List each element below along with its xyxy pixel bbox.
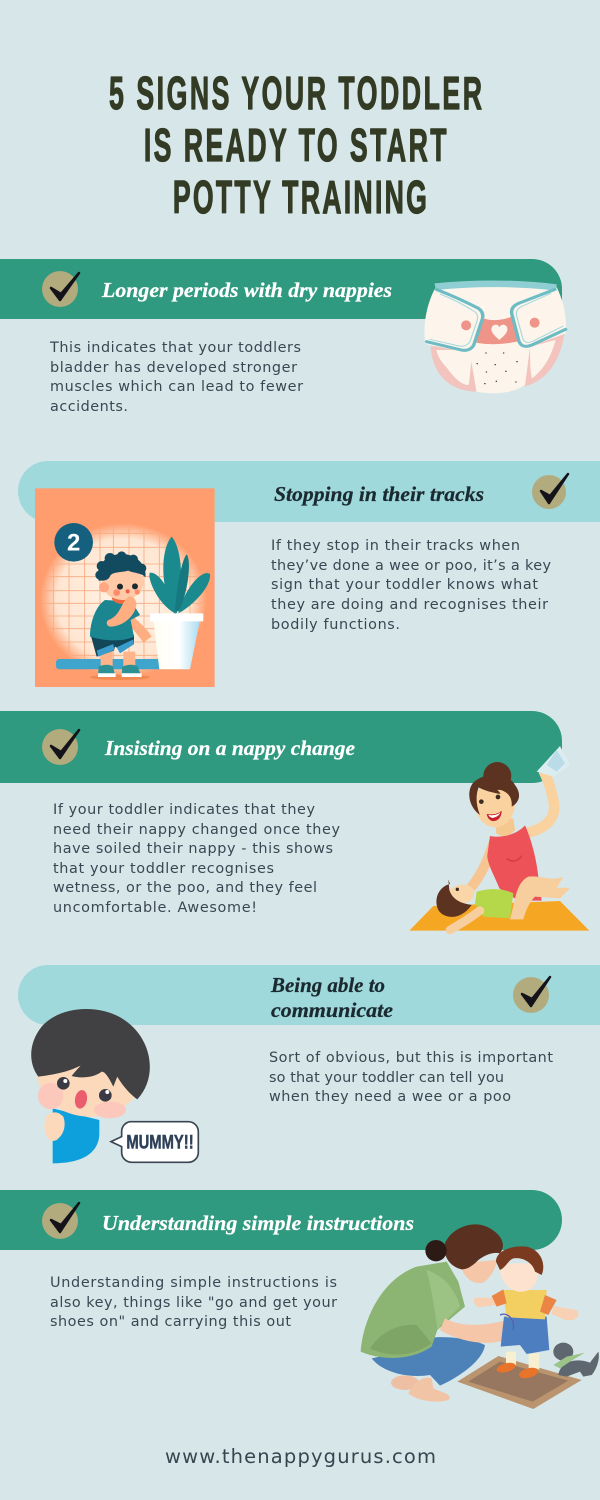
jeans [372, 1337, 485, 1386]
body text 1: This indicates that your toddlers [49, 340, 301, 356]
body text 3 [53, 802, 340, 916]
head [460, 1260, 497, 1283]
body text 1 [49, 340, 303, 415]
illustration: toddler stopping beside plant: 2 [67, 530, 80, 557]
body text 4: Sort of obvious, but this is important [269, 1050, 553, 1066]
illustration: toddler stopping beside plant [35, 488, 215, 687]
body text 2: they are doing and recognises their [271, 597, 548, 613]
heading 5: Understanding simple instructions [102, 1211, 414, 1235]
body text 4 [269, 1050, 553, 1105]
body text 5: shoes on" and carrying this out [50, 1314, 291, 1330]
panel: sign 4 communicate [18, 965, 600, 1163]
body text 3: wetness, or the poo, and they feel [53, 880, 317, 896]
heading 1: Longer periods with dry nappies [101, 278, 392, 302]
body text 1: muscles which can lead to fewer [50, 379, 303, 395]
title [109, 67, 482, 223]
child [90, 551, 152, 680]
speech bubble [111, 1122, 198, 1162]
heading bar 2 [18, 461, 600, 522]
body text 5 [50, 1275, 337, 1330]
body text 4: so that your toddler can tell you [269, 1070, 504, 1086]
illustration: nappy [424, 280, 566, 393]
heading bar 3 [0, 711, 562, 783]
panel: sign 1 dry nappies [0, 259, 566, 415]
illustration: child peeking with speech bubble [31, 1009, 198, 1163]
illustration: mother dressing toddler [361, 1224, 599, 1409]
icon: check 5 [42, 1203, 79, 1239]
heading 3: Insisting on a nappy change [104, 736, 355, 760]
heading 4 [270, 973, 393, 1022]
body text 5: Understanding simple instructions is [50, 1275, 337, 1291]
body text 2: sign that your toddler knows what [271, 577, 538, 593]
title: 5 SIGNS YOUR TODDLER [109, 67, 482, 119]
body text 2: they’ve done a wee or poo, it’s a key [271, 558, 551, 574]
plant [149, 537, 210, 613]
body text 2: bodily functions. [271, 617, 400, 633]
icon: check 4 [513, 977, 550, 1013]
body text 3: have soiled their nappy - this shows [53, 841, 333, 857]
body text 3: need their nappy changed once they [53, 822, 340, 838]
body text 2: If they stop in their tracks when [271, 538, 520, 554]
body text 3: that your toddler recognises [53, 861, 274, 877]
panel: sign 2 stopping in tracks [18, 461, 600, 687]
arm [440, 1318, 518, 1343]
footer url: www.thenappygurus.com [165, 1445, 436, 1468]
heading bar 1 [0, 259, 562, 319]
speech bubble: MUMMY!! [126, 1132, 194, 1153]
heading bar 4 [18, 965, 600, 1025]
body text 5: also key, things like "go and get your [50, 1295, 337, 1311]
shirt [361, 1262, 465, 1358]
body text 2 [271, 538, 551, 633]
heading 4: communicate [271, 998, 393, 1022]
body text 1: bladder has developed stronger [50, 360, 297, 376]
icon: check 2 [532, 474, 568, 509]
body text 4: when they need a wee or a poo [269, 1089, 511, 1105]
panel: sign 5 instructions [0, 1190, 599, 1409]
body text 3: uncomfortable. Awesome! [53, 900, 257, 916]
illustration: mother changing baby [409, 746, 589, 931]
feet [391, 1375, 419, 1390]
heading 2: Stopping in their tracks [274, 482, 484, 506]
icon: check 1 [42, 271, 79, 307]
body text 3: If your toddler indicates that they [53, 802, 315, 818]
title: POTTY TRAINING [173, 171, 427, 223]
toddler [474, 1297, 579, 1320]
title: IS READY TO START [144, 119, 447, 171]
icon: check 3 [42, 729, 79, 765]
heading bar 5 [0, 1190, 562, 1250]
panel: sign 3 nappy change [0, 711, 589, 931]
body text 1: accidents. [50, 399, 128, 415]
heading 4: Being able to [270, 973, 385, 997]
puppy [553, 1343, 599, 1377]
